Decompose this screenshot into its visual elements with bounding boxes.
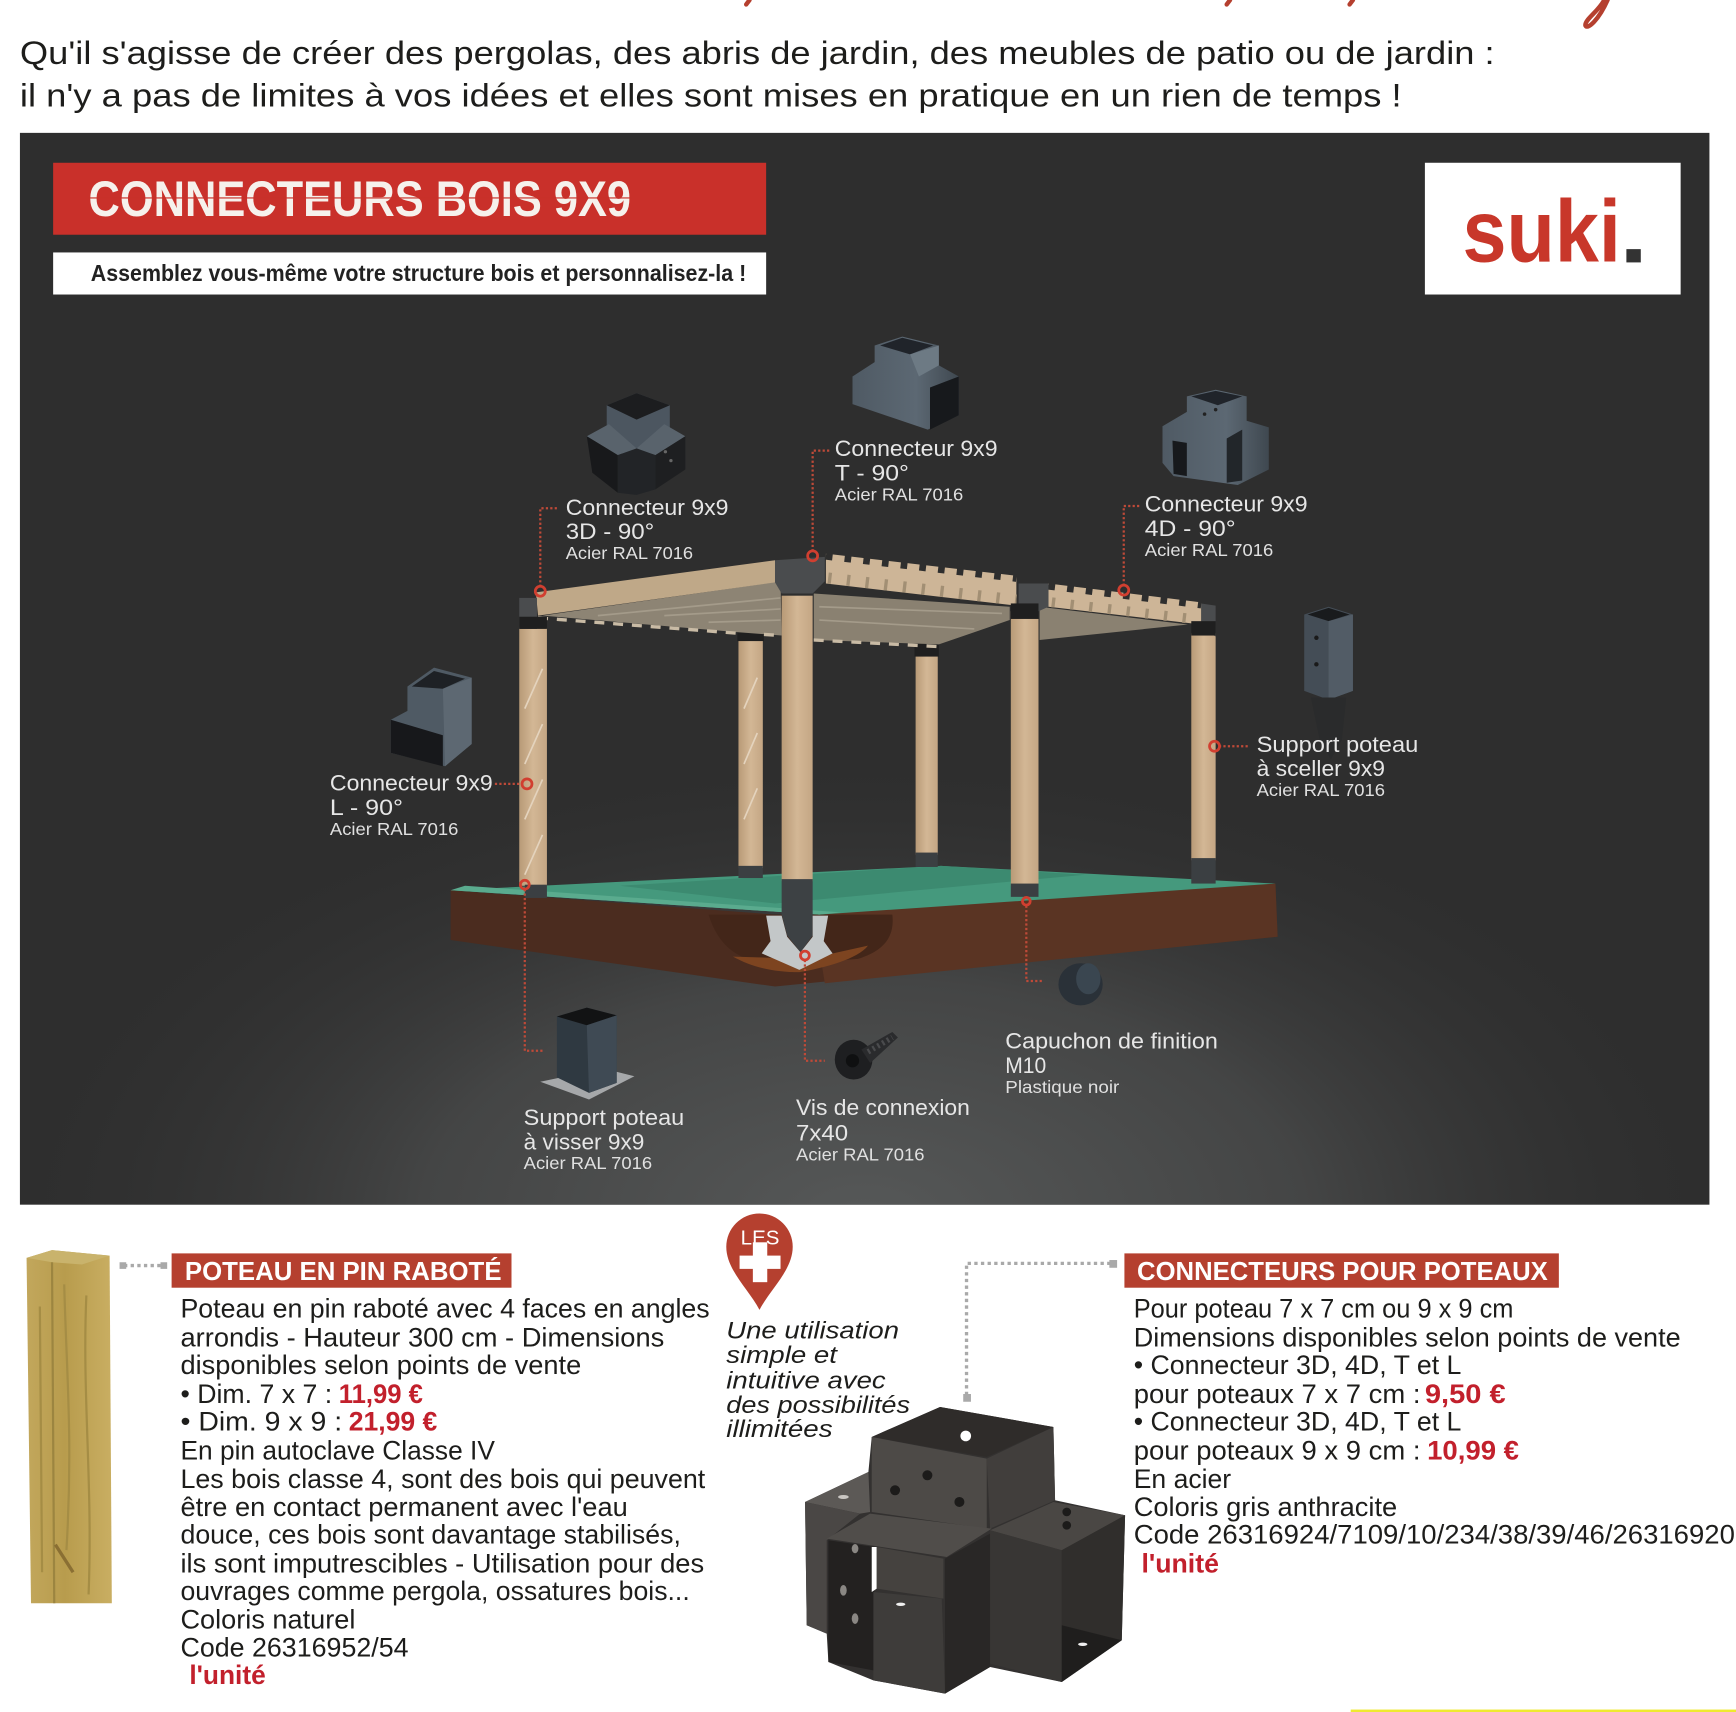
subtitle strip — [53, 252, 766, 295]
text block: pine post description: douce, ces bois sont davantage stabilisés, — [180, 1519, 681, 1549]
label: connector 3D: Acier RAL 7016 — [566, 543, 693, 563]
title fragment: clipped red script descenders — [746, 0, 1608, 27]
label: connector 3D: Connecteur 9x9 — [566, 495, 729, 520]
text block: pine post description: En pin autoclave Classe IV — [180, 1435, 495, 1465]
text block: connector description: Code 26316924/7109/10/234/38/39/46/26316920 — [1134, 1519, 1735, 1549]
callout: italic benefit text: intuitive avec — [726, 1367, 886, 1394]
leader: support to seal — [1210, 741, 1248, 751]
icon: finishing cap — [1058, 963, 1103, 1005]
text block: connector description: pour poteaux 9 x 9 cm : — [1134, 1435, 1420, 1465]
text block: connector description: 10,99 € — [1427, 1435, 1519, 1465]
text block: connector description: Dimensions disponibles selon points de vente — [1134, 1322, 1681, 1352]
text block: connector description: l'unité — [1141, 1548, 1219, 1578]
label: connector L — [330, 771, 493, 839]
leader: connector 3D — [535, 508, 558, 596]
product image: 4D steel connector — [805, 1407, 1125, 1694]
label: support to seal: à sceller 9x9 — [1257, 756, 1385, 781]
ground: green surface — [451, 866, 1275, 915]
label: connection screw: Vis de connexion — [796, 1095, 970, 1120]
label: connector 3D — [566, 495, 728, 563]
label: finishing cap: Plastique noir — [1005, 1077, 1119, 1097]
leader: connector 4D — [1119, 506, 1140, 595]
subtitle strip: Assemblez vous-même votre structure bois et personnalisez-la ! — [91, 260, 746, 286]
text block: connector description: pour poteaux 7 x 7 cm : — [1134, 1379, 1420, 1409]
icon: location pin les plus — [726, 1214, 793, 1310]
callout: italic benefit text: simple et — [726, 1342, 838, 1369]
text block: connector description — [1134, 1294, 1735, 1578]
text block: pine post description: Les bois classe 4, sont des bois qui peuvent — [180, 1464, 706, 1494]
text block: pine post description: Code 26316952/54 — [180, 1632, 409, 1662]
leader: support to screw — [520, 880, 542, 1051]
text block: pine post description: disponibles selon points de vente — [180, 1350, 581, 1380]
text block: connector description: • Connecteur 3D, 4D, T et L — [1134, 1407, 1461, 1437]
text block: connector description: Pour poteau 7 x 7 cm ou 9 x 9 cm — [1134, 1294, 1513, 1324]
label: connector L: L - 90° — [330, 795, 403, 820]
text block: connector description: 9,50 € — [1425, 1379, 1506, 1409]
product image: pine post — [27, 1250, 112, 1603]
text block: connector description: En acier — [1134, 1464, 1231, 1494]
label: finishing cap — [1005, 1029, 1218, 1097]
text block: pine post description: Poteau en pin raboté avec 4 faces en angles — [180, 1294, 710, 1324]
leader: finishing cap — [1022, 897, 1044, 981]
connector dots: product to heading — [963, 1260, 1117, 1402]
heading banner: CONNECTEURS BOIS 9X9 — [89, 171, 631, 227]
connector dots: post to heading — [120, 1262, 167, 1269]
text block: pine post description: l'unité — [189, 1660, 266, 1690]
icon: post support to seal — [1304, 607, 1353, 760]
label: connector T: Connecteur 9x9 — [835, 436, 998, 461]
heading: poteau en pin raboté: POTEAU EN PIN RABOTÉ — [185, 1257, 502, 1286]
text block: pine post description: ils sont imputrescibles - Utilisation pour des — [180, 1548, 704, 1578]
label: connector 3D: 3D - 90° — [566, 519, 654, 544]
text block: pine post description: • Dim. 7 x 7 : — [180, 1379, 332, 1409]
callout: italic benefit text — [726, 1318, 910, 1443]
post connectors — [519, 557, 1216, 637]
text block: pine post description: 11,99 € — [339, 1379, 423, 1409]
icon: post support to screw — [540, 1008, 634, 1099]
icon: connector T — [852, 337, 959, 430]
label: connector 4D: 4D - 90° — [1145, 516, 1236, 541]
panel: dark product diagram — [20, 133, 1709, 1205]
label: support to seal: Acier RAL 7016 — [1257, 780, 1385, 800]
front posts — [519, 596, 1216, 952]
label: connector 4D: Connecteur 9x9 — [1145, 492, 1308, 517]
concrete footing — [762, 916, 833, 970]
label: support to screw — [524, 1105, 684, 1173]
icon: location pin les plus: LES — [741, 1228, 779, 1250]
heading banner — [53, 163, 766, 235]
roof beams and slats — [536, 554, 1201, 624]
text block: pine post description: ouvrages comme pergola, ossatures bois... — [180, 1576, 690, 1606]
leader: connector L — [495, 779, 532, 789]
label: connector 4D — [1145, 492, 1308, 560]
pergola illustration — [451, 554, 1278, 987]
text block: pine post description: • Dim. 9 x 9 : — [180, 1407, 342, 1437]
text block: pine post description: 21,99 € — [349, 1407, 438, 1437]
text block: pine post description: Coloris naturel — [180, 1605, 355, 1635]
label: connector L: Connecteur 9x9 — [330, 771, 493, 796]
text block: pine post description: arrondis - Hauteur 300 cm - Dimensions — [180, 1322, 664, 1352]
label: connection screw: Acier RAL 7016 — [796, 1144, 925, 1164]
label: support to screw: Acier RAL 7016 — [524, 1153, 652, 1173]
label: finishing cap: M10 — [1005, 1053, 1046, 1078]
logo: suki — [1425, 163, 1681, 295]
icon: connector 4D — [1162, 390, 1269, 485]
icon: screw — [835, 1032, 898, 1080]
text block: pine post description — [180, 1294, 710, 1690]
icon: connector 3D — [587, 393, 685, 495]
label: connector T — [835, 436, 998, 504]
logo: suki: suki — [1463, 181, 1621, 280]
intro text: Qu'il s'agisse de créer des pergolas, des abris de jardin, des meubles de patio ou de jardin : — [20, 35, 1495, 71]
yellow strip at page bottom — [1351, 1710, 1736, 1712]
leader: connection screw — [800, 951, 825, 1061]
text block: connector description: • Connecteur 3D, 4D, T et L — [1134, 1350, 1461, 1380]
text block: connector description: Coloris gris anthracite — [1134, 1492, 1397, 1522]
label: support to seal: Support poteau — [1257, 732, 1418, 757]
label: support to seal — [1257, 732, 1418, 800]
heading: connecteurs pour poteaux: CONNECTEURS POUR POTEAUX — [1137, 1258, 1548, 1286]
label: connection screw: 7x40 — [796, 1120, 848, 1145]
callout: italic benefit text: des possibilités — [726, 1392, 910, 1419]
intro text — [20, 35, 1495, 113]
text block: pine post description: être en contact permanent avec l'eau — [180, 1492, 628, 1522]
label: connector T: Acier RAL 7016 — [835, 484, 963, 504]
label: finishing cap: Capuchon de finition — [1005, 1029, 1218, 1054]
ground: soil block — [451, 884, 1278, 987]
label: support to screw: Support poteau — [524, 1105, 684, 1130]
label: connector L: Acier RAL 7016 — [330, 819, 459, 839]
intro text: il n'y a pas de limites à vos idées et elles sont mises en pratique en un rien de temps ! — [20, 77, 1402, 113]
callout: italic benefit text: Une utilisation — [726, 1318, 899, 1345]
label: connector 4D: Acier RAL 7016 — [1145, 540, 1273, 560]
rear posts — [737, 628, 939, 878]
label: support to screw: à visser 9x9 — [524, 1129, 644, 1154]
label: connector T: T - 90° — [835, 461, 909, 486]
leader: connector T — [808, 451, 830, 561]
label: connection screw — [796, 1095, 970, 1164]
callout: italic benefit text: illimitées — [726, 1416, 833, 1443]
icon: connector L — [391, 668, 472, 766]
roof underside — [538, 581, 1188, 647]
